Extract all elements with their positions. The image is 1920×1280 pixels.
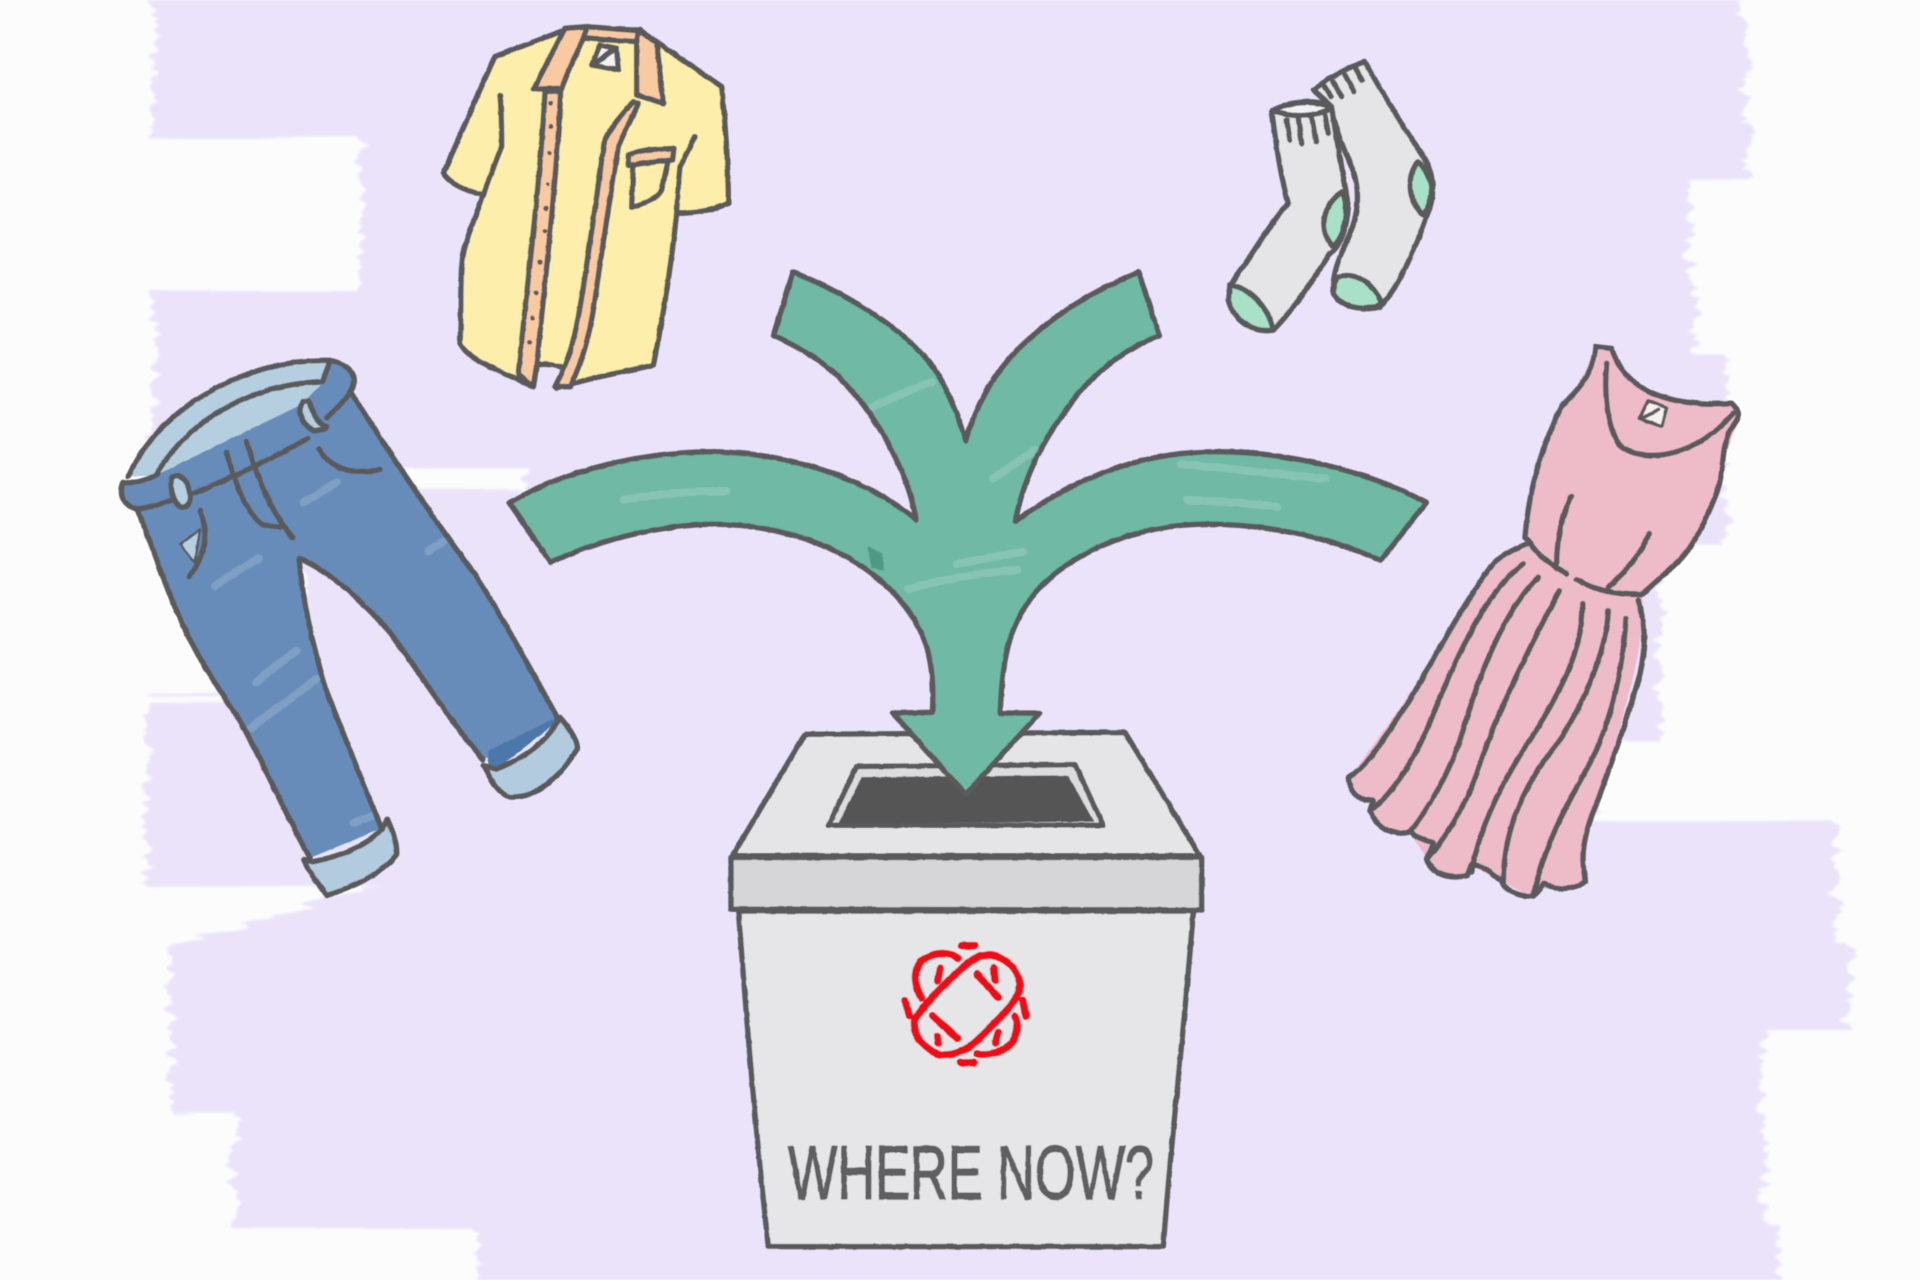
jeans lining	[127, 360, 330, 477]
arrow dark patch	[867, 546, 884, 571]
denim highlights	[215, 482, 443, 823]
dress waist	[1530, 543, 1640, 595]
jeans	[121, 360, 577, 895]
dress fill	[1348, 347, 1741, 896]
jeans cuff right	[483, 717, 577, 797]
ballot box	[731, 732, 1202, 1247]
right sock toe	[1333, 275, 1382, 308]
box lid top	[733, 732, 1200, 856]
fly and pockets	[189, 442, 380, 577]
box body	[738, 911, 1193, 1247]
box lid lip	[731, 857, 1202, 910]
left placket	[518, 91, 561, 387]
branching arrow	[509, 272, 1426, 794]
slot opening	[828, 765, 1103, 825]
jeans outlines	[352, 394, 558, 719]
shirt	[443, 27, 728, 388]
shirt tag	[592, 45, 618, 70]
left sock toe	[1228, 285, 1273, 330]
right sock	[1313, 62, 1433, 309]
shirt buttons	[528, 101, 553, 345]
waistband	[123, 360, 354, 483]
left sock heel	[1324, 192, 1346, 247]
dress pleats	[1370, 496, 1649, 896]
socks	[1228, 62, 1433, 330]
dress	[1348, 347, 1741, 896]
belt loops	[171, 476, 191, 507]
pocket	[632, 160, 668, 207]
shirt body	[443, 30, 728, 388]
collar	[533, 27, 663, 103]
right placket	[555, 102, 638, 387]
box label: WHERE NOW?	[788, 1131, 1154, 1216]
dress tag	[1639, 400, 1667, 426]
jeans cuff left	[303, 819, 397, 895]
logo	[905, 946, 1026, 1063]
dress outline	[1642, 403, 1738, 595]
jeans body	[121, 360, 558, 858]
darker cuff shadow	[488, 717, 558, 769]
slot dark interior	[838, 775, 1094, 824]
left sock	[1228, 102, 1348, 330]
arrow brush highlights	[623, 382, 1326, 589]
right sock heel	[1410, 162, 1431, 215]
